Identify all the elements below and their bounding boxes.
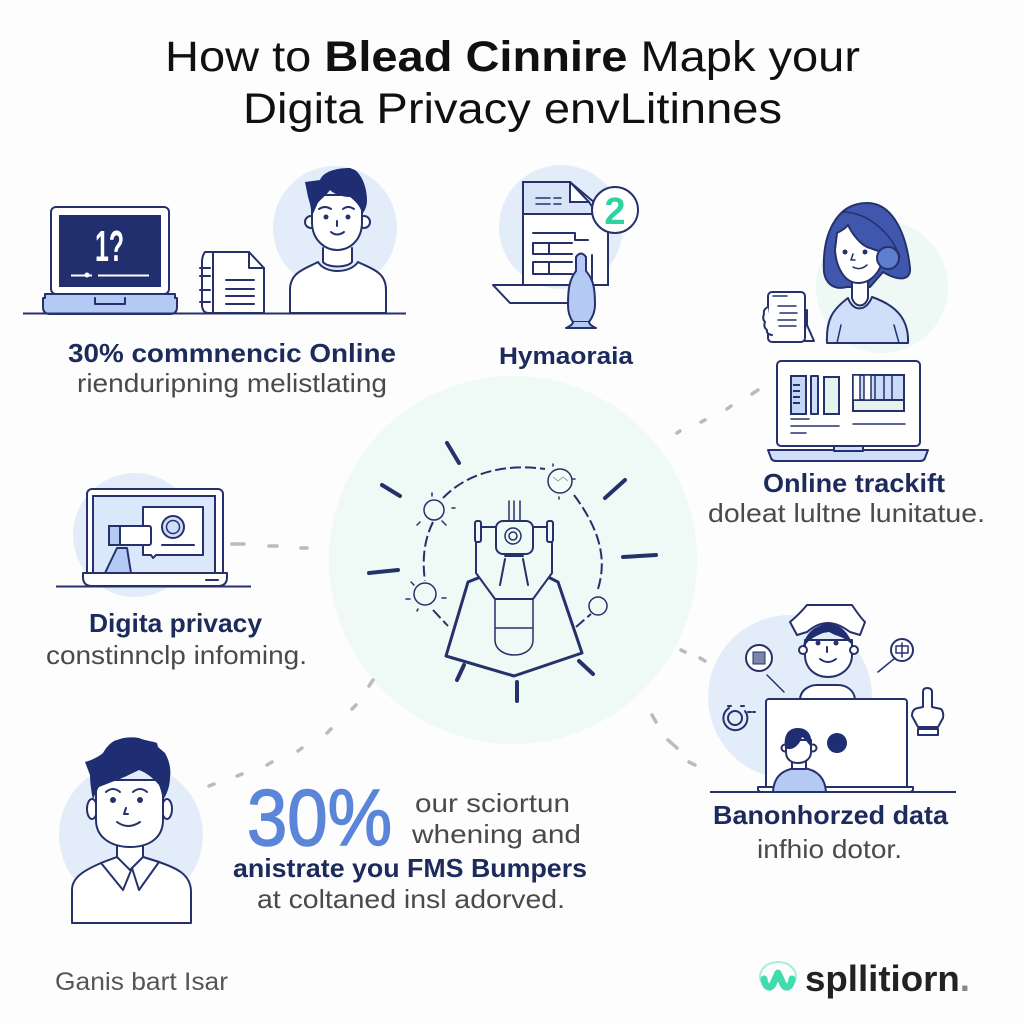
icon: small person <box>773 728 826 792</box>
text: unauthorized data caption: infhio dotor. <box>757 834 902 864</box>
icon: laptop: 1? <box>95 222 124 271</box>
text: online tracking caption: Online trackift <box>763 468 945 498</box>
panel: digital privacy <box>46 473 307 670</box>
arrow: dashed connector to hub <box>209 680 373 786</box>
text: statistic description: whening and <box>411 819 581 849</box>
footer note: Ganis bart Isar <box>55 968 228 996</box>
text: statistic description: anistrate you FMS Bumpers <box>233 853 587 883</box>
text: laptop caption: 30% commnencic Online <box>68 338 396 368</box>
panel: online tracking <box>677 203 985 528</box>
panel: laptop and person <box>23 166 406 398</box>
title: How to Blead Cinnire Mapk your <box>165 33 860 81</box>
text: big statistic: 30% <box>247 773 392 862</box>
text: logo wordmark: spllitiorn. <box>805 958 970 999</box>
title <box>165 33 860 133</box>
text: digital privacy caption: constinnclp infoming. <box>46 640 307 670</box>
icon: ground line <box>23 312 406 314</box>
icon: logo mark <box>760 962 796 987</box>
icon: dashed orbit <box>424 467 602 627</box>
text: laptop caption: rienduripning melistlating <box>77 368 387 398</box>
text: online tracking caption <box>708 468 985 528</box>
icon: laptop <box>43 207 177 314</box>
panel: document and bottle <box>493 165 638 370</box>
central hub circle <box>329 376 697 744</box>
icon: number badge <box>592 187 638 233</box>
title: Digita Privacy envLitinnes <box>243 85 782 133</box>
text: document caption: Hymaoraia <box>499 343 634 370</box>
icon: ground line <box>710 791 956 793</box>
text: digital privacy caption: Digita privacy <box>89 608 263 638</box>
icon: outer hood <box>446 578 582 676</box>
arrow: dashed connectors to hub <box>652 650 705 765</box>
panel: unauthorized data <box>652 605 956 864</box>
icon: laptop with card <box>83 489 227 586</box>
icon: woman with headset <box>824 203 910 343</box>
icon: person background circle <box>273 166 397 290</box>
text: statistic description <box>233 788 587 914</box>
text: digital privacy caption <box>46 608 307 670</box>
icon: background circle <box>59 763 203 907</box>
icon: person <box>290 168 386 313</box>
icon: man portrait <box>72 737 191 923</box>
icon: number badge: 2 <box>604 191 626 233</box>
text: statistic description: at coltaned insl adorved. <box>257 884 565 914</box>
text: unauthorized data caption: Banonhorzed data <box>713 800 949 830</box>
icon: notebook document <box>200 252 264 313</box>
icon: document <box>523 182 608 285</box>
icon: orbit nodes <box>406 464 607 615</box>
icon: background circle <box>816 221 948 353</box>
icon: bottle <box>566 254 596 328</box>
icon: nurse figure <box>790 605 865 699</box>
icon: phone in hand <box>763 292 814 342</box>
icon: radiating rays <box>369 443 656 701</box>
icon: ground line <box>56 586 251 588</box>
arrow: dashed connector to hub <box>232 544 307 548</box>
icon: background circle <box>73 473 197 597</box>
text: laptop caption <box>68 338 396 398</box>
text: statistic description: our sciortun <box>415 788 570 818</box>
logo <box>760 958 970 999</box>
icon: background circle <box>708 615 872 779</box>
panel: central robot bulb <box>369 443 656 701</box>
icon: raised hand <box>912 688 943 735</box>
arrow: dashed connector to hub <box>677 390 758 433</box>
icon: tray <box>493 285 608 303</box>
text: online tracking caption: doleat lultne lunitatue. <box>708 498 985 528</box>
icon: robot bulb <box>475 501 553 655</box>
panel: bottom left statistic <box>59 680 587 923</box>
icon: background circle <box>499 165 623 289</box>
text: unauthorized data caption <box>713 800 949 864</box>
icon: laptop with charts <box>768 361 928 461</box>
icon: satellite symbols <box>723 639 913 730</box>
icon: laptop <box>758 699 913 792</box>
